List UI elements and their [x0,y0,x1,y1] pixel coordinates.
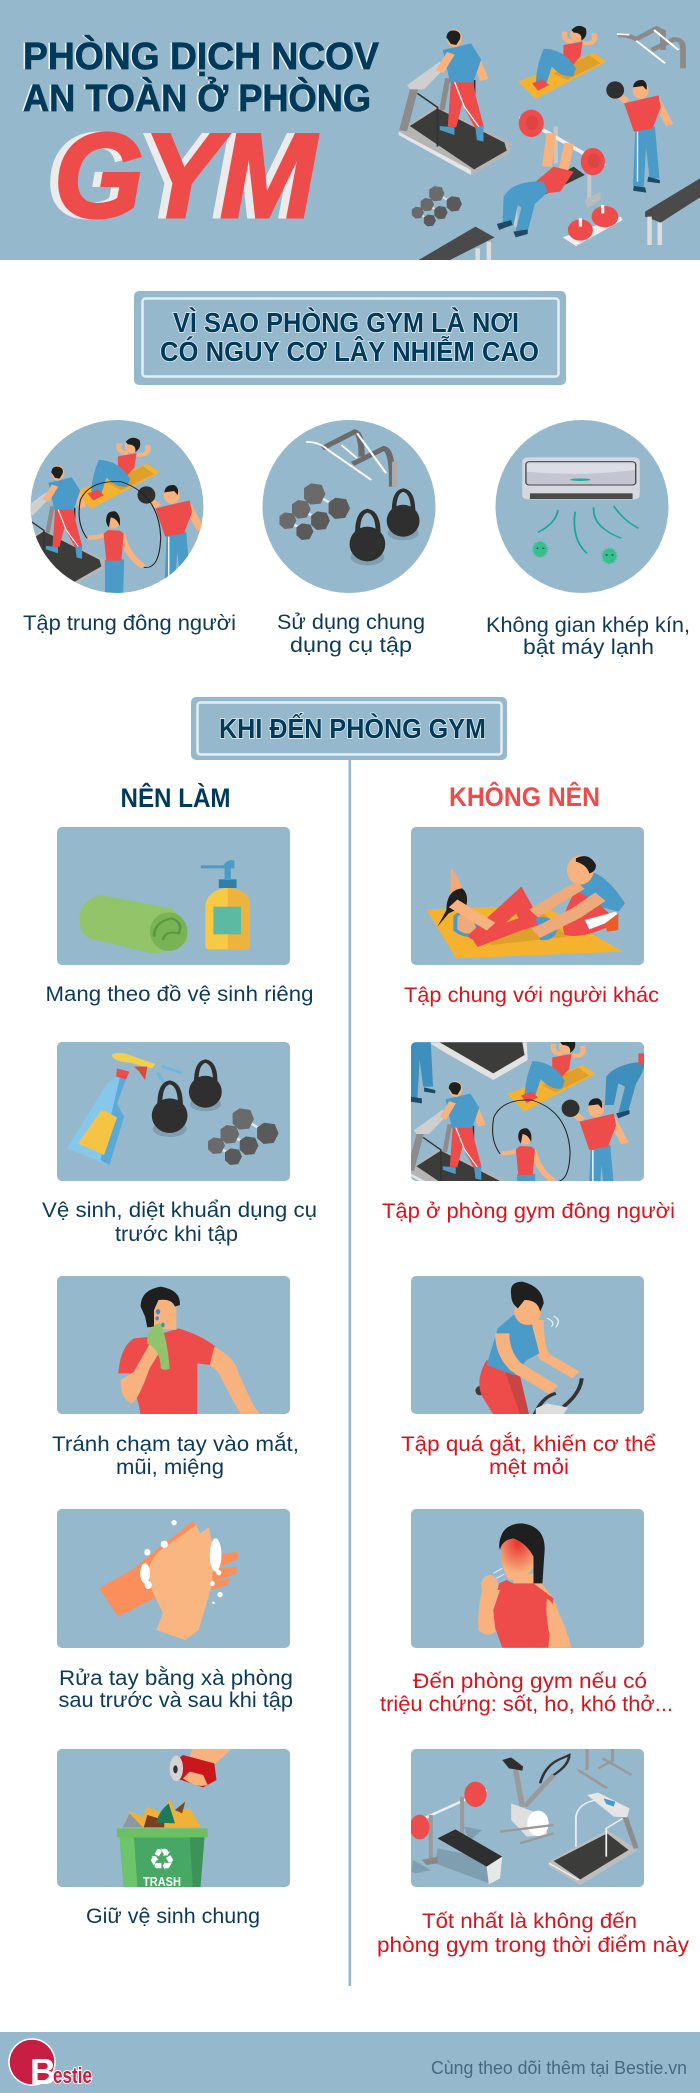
gym illustration [399,26,700,261]
label: wash hands: Rửa tay bằng xà phòng [59,1667,293,1690]
reason 3: closed room with AC [486,420,690,659]
label: do not touch face: Tránh chạm tay vào mắt, [52,1433,299,1456]
column heading: do not: KHÔNG NÊN [449,781,600,812]
label: do not overtrain [401,1433,656,1479]
card: spray and kettlebells [57,1042,290,1181]
reason 1: crowded: Tập trung đông người [23,612,236,635]
label: clean equipment: Vệ sinh, diệt khuẩn dụng cụ [42,1199,317,1222]
label: do not go when symptomatic: triệu chứng: sốt, ho, khó thở... [380,1693,673,1716]
label: do not overtrain: Tập quá gắt, khiến cơ thể [401,1433,656,1456]
card: trash bin [57,1749,290,1889]
title [21,34,380,120]
label: do not go when symptomatic [380,1670,673,1716]
card: towel and soap [57,827,290,965]
footer note: Cùng theo dõi thêm tại Bestie.vn [431,2058,687,2078]
label: best not to go: phòng gym trong thời điểm này [377,1934,690,1957]
card: trash bin: TRASH [143,1875,181,1889]
title word GYM: GYM [54,109,319,243]
center divider line [348,760,351,1986]
heading box: why gyms are risky: VÌ SAO PHÒNG GYM LÀ NƠI [173,307,519,338]
logo: estie [53,2063,92,2088]
label: clean equipment: trước khi tập [115,1223,238,1246]
reason 3: closed room with AC: bật máy lạnh [523,636,654,659]
label: best not to go: Tốt nhất là không đến [422,1910,637,1933]
heading box: why gyms are risky: CÓ NGUY CƠ LÂY NHIỄM CAO [160,336,539,367]
label: bring own items: Mang theo đồ vệ sinh riêng [46,983,314,1006]
title: PHÒNG DỊCH NCOV [23,34,380,78]
card: empty gym equipment [410,1749,644,1887]
label: do not touch face: mũi, miệng [116,1456,224,1479]
heading box: why gyms are risky [134,291,566,385]
reason 2: shared equipment: Sử dụng chung [277,611,425,634]
heading box: at the gym: KHI ĐẾN PHÒNG GYM [219,713,486,744]
label: do not train together: Tập chung với người khác [404,984,659,1007]
card: tired woman on bike [411,1276,644,1414]
label: wash hands [58,1667,293,1712]
label: do not go when symptomatic: Đến phòng gym nếu có [413,1670,647,1693]
title: PHÒNG DỊCH NCOV [21,34,378,78]
logo [9,2039,92,2092]
label: keep clean: Giữ vệ sinh chung [86,1905,260,1928]
card: trash bin: ♻ [149,1843,175,1878]
circle illustration: crowded gym [30,420,204,593]
label: do not touch face [52,1433,299,1479]
card: exercising together [411,827,644,965]
footer [0,2032,700,2093]
card: woman with fever [411,1509,644,1648]
card: washing hands [57,1509,290,1648]
card: crowded gym [411,1042,644,1181]
title: AN TOÀN Ở PHÒNG [21,76,369,120]
title word GYM: GYM [46,109,311,243]
label: do not train in crowded gyms: Tập ở phòng gym đông người [382,1200,675,1223]
label: clean equipment [42,1199,317,1246]
title: AN TOÀN Ở PHÒNG [23,76,371,120]
circle illustration: air conditioner and virus [496,420,668,593]
label: best not to go [377,1910,690,1957]
reason 1: crowded [12,420,236,635]
label: wash hands: sau trước và sau khi tập [58,1689,293,1712]
reason 3: closed room with AC: Không gian khép kín, [486,614,690,637]
reason 2: shared equipment [262,420,436,657]
circle illustration: weights [262,420,436,593]
logo: B [30,2051,56,2092]
column heading: do: NÊN LÀM [120,782,230,813]
card: man touching face [57,1276,290,1414]
label: do not overtrain: mệt mỏi [489,1456,569,1479]
header banner [0,0,700,261]
reason 2: shared equipment: dụng cụ tập [290,634,412,657]
heading box: at the gym [191,697,507,760]
